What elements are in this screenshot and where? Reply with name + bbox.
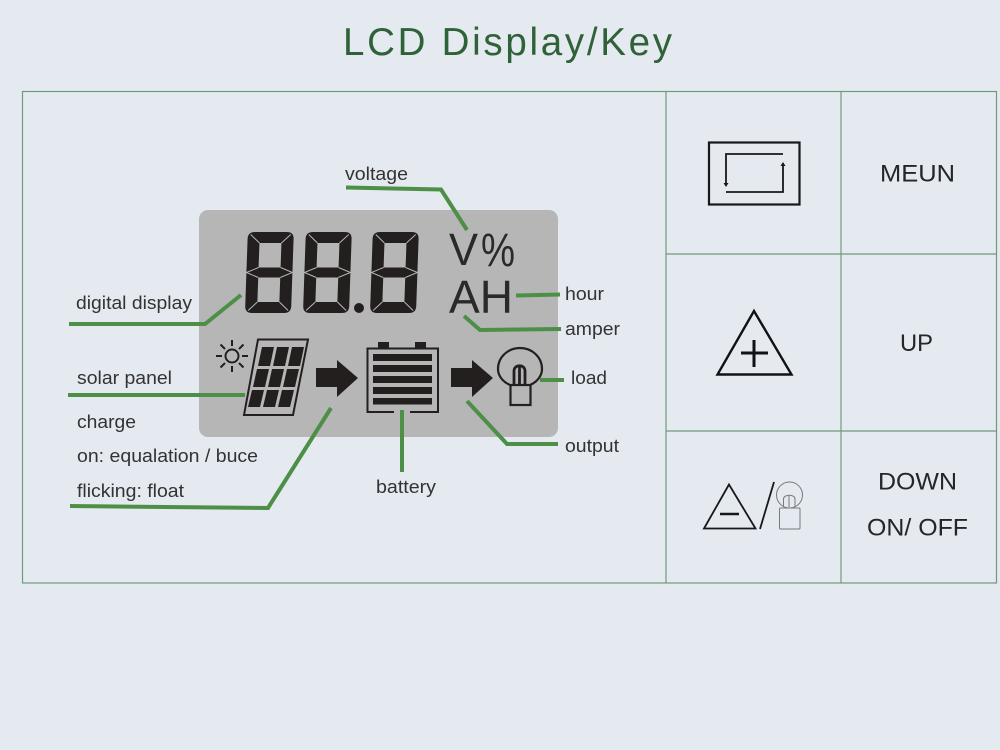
label: up: UP <box>900 330 933 357</box>
arrow: output <box>451 360 493 397</box>
icon: sun <box>216 340 248 372</box>
panel: LCD diagram <box>68 163 620 508</box>
table frame <box>22 91 996 583</box>
callout labels: voltage <box>345 163 408 184</box>
label: down on/off: DOWN <box>878 468 957 496</box>
label: down on/off <box>867 468 968 542</box>
icon: down and on/off key <box>704 482 802 529</box>
unit symbols: % <box>481 223 515 276</box>
callout labels: battery <box>376 476 437 497</box>
callout labels: output <box>565 435 619 456</box>
callout labels: on: equalation / buce <box>77 445 258 466</box>
unit symbols <box>449 223 515 323</box>
unit symbols: AH <box>449 271 513 323</box>
icon: battery <box>368 342 438 412</box>
icon: load bulb <box>498 348 542 405</box>
callout labels: flicking: float <box>77 480 184 501</box>
digital readout 88.8 <box>245 232 419 313</box>
arrow: charge <box>316 360 358 397</box>
title: LCD Display/Key <box>343 21 673 64</box>
label: menu: MEUN <box>880 160 955 188</box>
icon: up key <box>718 311 792 374</box>
unit symbols: V <box>449 224 478 275</box>
callout labels: charge <box>77 411 136 432</box>
leader lines <box>68 188 564 508</box>
icon: solar panel <box>244 340 308 415</box>
icon: menu key <box>709 142 800 204</box>
callout labels: hour <box>565 283 604 304</box>
label: down on/off: ON/ OFF <box>867 514 968 542</box>
LCD screen <box>199 210 558 437</box>
callout labels <box>76 163 620 501</box>
callout labels: solar panel <box>77 367 172 388</box>
callout labels: amper <box>565 318 620 339</box>
callout labels: digital display <box>76 292 193 313</box>
callout labels: load <box>571 367 607 388</box>
